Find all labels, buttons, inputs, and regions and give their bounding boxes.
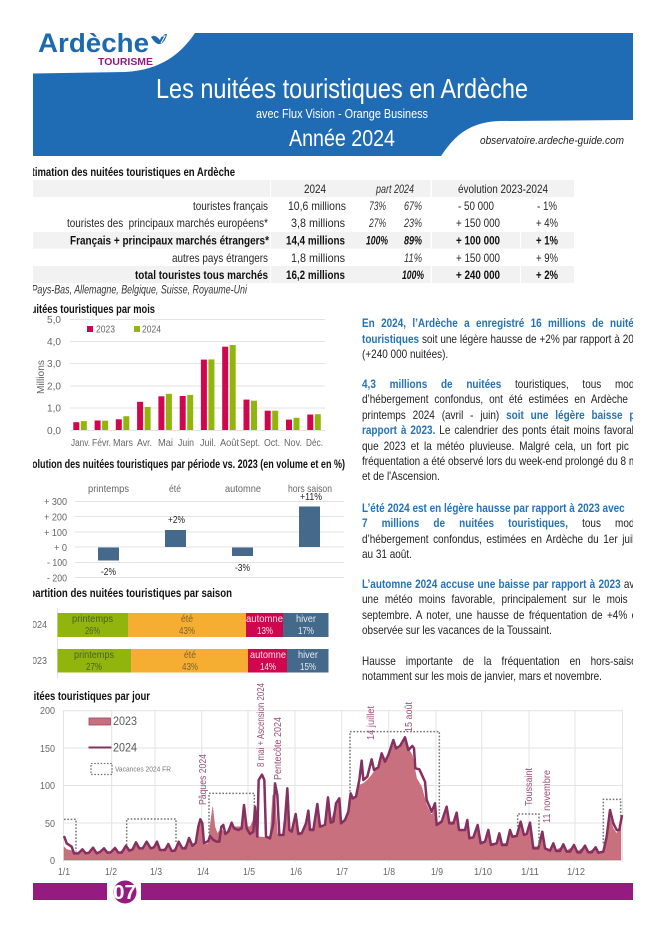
stacked bar 2023: automne	[250, 649, 286, 661]
row: total français + étrangers: Français + principaux marchés étrangers*	[70, 234, 269, 248]
paragraph: automne: L’automne 2024 accuse une baisse par rapport à 2023 avec	[362, 578, 645, 591]
paragraph: été: au 31 août.	[362, 548, 412, 561]
subtitle: avec Flux Vision - Orange Business	[256, 107, 428, 121]
dotted outlines: vacances 2024	[64, 732, 621, 852]
legend: Vacances 2024 FR	[115, 766, 171, 774]
paragraph: bilan 2024: (+240 000 nuitées).	[362, 348, 448, 361]
stacked bar 2023: 14%	[260, 661, 276, 673]
legend: 2023	[96, 324, 115, 336]
stacked bar 2023: 43%	[182, 661, 198, 673]
percent labels	[101, 491, 322, 578]
y axis labels: - 100	[47, 557, 67, 569]
annotations: key dates: 8 mai + Ascension 2024	[255, 683, 267, 767]
paragraph: printemps: rapport à 2023. Le calendrier des ponts était moins favorable	[362, 424, 645, 437]
x axis labels: 1/9	[431, 866, 443, 878]
row: total français + étrangers: + 1%	[536, 234, 558, 248]
x axis labels: 1/3	[150, 866, 162, 878]
row: marchés européens: touristes des principaux marchés européens*	[67, 216, 268, 230]
row: touristes français: - 1%	[537, 199, 557, 213]
paragraph: bilan 2024	[362, 318, 633, 360]
bars 2023	[73, 347, 313, 430]
y axis labels: + 200	[44, 512, 67, 524]
bars	[98, 506, 320, 560]
paragraph: hors-saison: notamment sur les mois de janvier, mars et novembre.	[362, 670, 602, 683]
month labels	[71, 438, 322, 448]
y axis labels: 2,0	[47, 380, 61, 392]
y axis labels	[35, 314, 61, 437]
month labels: Mai	[158, 437, 173, 449]
annotations: key dates: Toussaint	[523, 768, 535, 806]
row: total tous marchés: + 240 000	[456, 268, 500, 282]
y axis labels: 50	[45, 818, 55, 830]
paragraph: automne	[362, 579, 633, 634]
row: marchés européens: 23%	[403, 218, 422, 230]
stacked bar 2024: 13%	[257, 625, 273, 637]
season labels	[88, 484, 332, 494]
x axis labels: 1/8	[383, 866, 395, 878]
paragraph: automne: septembre. A noter, une hausse de fréquentation de +4% est	[362, 609, 645, 622]
y axis labels: + 0	[54, 542, 67, 554]
percent labels: +11%	[300, 491, 322, 503]
row: touristes français: - 50 000	[458, 199, 494, 213]
row: marchés européens	[67, 218, 558, 230]
percent labels: +2%	[168, 514, 185, 526]
year heading: Année 2024	[289, 125, 395, 151]
month labels: Janv.	[71, 437, 90, 449]
paragraph: été: d’hébergement confondus, estimées en Ardèche du 1er juillet	[362, 533, 645, 546]
row: total français + étrangers	[70, 236, 558, 247]
paragraph: automne: observée sur les vacances de la Toussaint.	[362, 624, 552, 637]
month labels: Juil.	[200, 437, 216, 449]
row: total tous marchés: total touristes tous marchés	[135, 268, 268, 282]
stacked bar 2023: 15%	[300, 661, 316, 673]
season labels: hors saison	[288, 483, 332, 495]
paragraph: printemps: 4,3 millions de nuitées touristiques, tous modes	[362, 378, 645, 391]
paragraph: hors-saison: Hausse importante de la fréquentation en hors-saison,	[362, 655, 645, 668]
annotations: key dates: 15 août	[403, 702, 415, 732]
table header row: évolution 2023-2024	[458, 182, 548, 196]
x axis labels: 1/4	[197, 866, 209, 878]
legend: 2024	[113, 742, 138, 754]
paragraph: printemps: d’hébergement confondus, ont été estimées en Ardèche au	[362, 393, 645, 406]
row: total tous marchés: 16,2 millions	[286, 268, 345, 282]
y axis labels: 0,0	[47, 425, 61, 437]
y axis labels: 100	[40, 780, 55, 792]
row: touristes français	[193, 202, 557, 212]
area chart: nuitées par jour	[40, 683, 622, 878]
row: touristes français: 73%	[369, 201, 386, 213]
text block: commentary	[362, 318, 633, 682]
stacked bar 2023: hiver	[298, 649, 318, 661]
percent labels: -3%	[235, 562, 250, 574]
stacked bar 2023: 2023	[27, 655, 47, 667]
table header row: 2024	[304, 182, 326, 196]
month labels: Avr.	[137, 437, 152, 449]
row: autres pays: autres pays étrangers	[172, 251, 268, 265]
row: touristes français: 67%	[404, 201, 422, 213]
row: marchés européens: + 150 000	[456, 216, 500, 230]
x axis labels: 1/2	[105, 866, 117, 878]
legend: 2023	[113, 716, 137, 728]
stacked bar 2024: été	[181, 613, 193, 625]
paragraph: bilan 2024: touristiques soit une légère hausse de +2% par rapport à 2023	[362, 332, 645, 346]
title: Les nuitées touristiques en Ardèche	[156, 73, 528, 104]
logo: Ardèche Tourisme: TOURISME	[98, 56, 153, 68]
footnote: *Pays-Bas, Allemagne, Belgique, Suisse, Royaume-Uni	[28, 284, 247, 296]
y axis labels: 3,0	[47, 358, 61, 370]
y axis labels: 4,0	[47, 336, 61, 348]
legend	[88, 716, 171, 774]
month labels: Déc.	[306, 437, 323, 449]
heading: répartition par saison: Répartition des nuitées touristiques par saison	[17, 588, 232, 600]
paragraph: été	[362, 503, 633, 558]
heading: estimation: Estimation des nuitées touristiques en Ardèche	[20, 167, 235, 179]
row: total français + étrangers: 14,4 millions	[286, 234, 345, 248]
month labels: Juin	[178, 437, 194, 449]
stacked bar 2024: 17%	[298, 625, 314, 637]
heading: nuitées par mois: Nuitées touristiques par mois	[24, 304, 155, 316]
month labels: Août	[220, 437, 239, 449]
season labels: printemps	[88, 483, 129, 495]
paragraph: printemps: fréquentation a été observé lors du week-end prolongé du 8 mai	[362, 455, 645, 468]
website: observatoire.ardeche-guide.com	[480, 135, 624, 147]
y axis labels: - 200	[47, 572, 67, 584]
paragraph: bilan 2024: En 2024, l’Ardèche a enregistré 16 millions de nuitées	[362, 317, 645, 330]
legend: 2024	[142, 324, 161, 336]
bar chart: évolution par période	[44, 483, 344, 584]
annotations: key dates: 11 novembre	[541, 770, 553, 823]
legend	[87, 326, 161, 332]
row: marchés européens: 27%	[368, 218, 386, 230]
x axis labels: 1/5	[243, 866, 255, 878]
paragraph: automne: une météo moins favorable, principalement sur le mois de	[362, 593, 645, 606]
paragraph: printemps: et de l'Ascension.	[362, 470, 440, 483]
season labels: automne	[225, 483, 261, 495]
stacked bar 2024: 43%	[179, 625, 195, 637]
y axis labels: 1,0	[47, 402, 61, 414]
stacked bar 2024	[27, 613, 328, 637]
stacked bar 2024: automne	[246, 613, 283, 625]
paragraph: été: 7 millions de nuitées touristiques, tous modes	[362, 517, 645, 530]
row: touristes français: 10,6 millions	[288, 199, 346, 213]
stacked bars: répartition par saison	[27, 608, 328, 678]
row: touristes français: touristes français	[193, 199, 268, 213]
x axis labels: 1/11	[521, 866, 539, 878]
row: total français + étrangers: 100%	[366, 236, 388, 248]
paragraph: hors-saison	[362, 656, 633, 682]
table header row: part 2024	[375, 184, 414, 196]
stacked bar 2024: 26%	[85, 625, 100, 637]
stacked bar 2024: 2024	[27, 619, 47, 631]
paragraph: printemps: que 2023 et la météo pluvieuse. Malgré cela, un fort pic de	[362, 440, 645, 453]
row: autres pays: + 150 000	[456, 251, 500, 265]
month labels: Mars	[113, 437, 133, 449]
row: total français + étrangers: + 100 000	[456, 234, 500, 248]
stacked bar 2023: printemps	[74, 649, 114, 661]
month labels: Févr.	[92, 437, 111, 449]
heading: nuitées par jour: Nuitées touristiques par jour	[21, 691, 150, 703]
y axis labels: 0	[50, 855, 55, 867]
month labels: Nov.	[284, 437, 302, 449]
y axis labels: Millions	[35, 360, 47, 394]
row: marchés européens: + 4%	[536, 216, 558, 230]
stacked bar 2023: été	[184, 649, 196, 661]
paragraph: printemps: printemps 2024 (avril - juin) soit une légère baisse par	[362, 409, 645, 422]
panel: table of estimated nights	[33, 180, 574, 283]
row: autres pays: 11%	[404, 253, 422, 265]
header banner	[33, 28, 633, 156]
logo: Ardèche Tourisme	[38, 33, 167, 65]
row: autres pays: + 9%	[536, 251, 558, 265]
y axis labels: 5,0	[47, 314, 61, 326]
row: total français + étrangers: 89%	[404, 236, 422, 248]
row: autres pays	[172, 254, 558, 264]
x axis labels: 1/10	[474, 866, 492, 878]
page number badge: 07	[113, 882, 136, 904]
season labels: été	[169, 483, 181, 495]
x axis labels: 1/7	[336, 866, 348, 878]
annotations: key dates	[197, 683, 553, 823]
daily series	[64, 732, 622, 860]
month labels: Oct.	[264, 437, 280, 449]
y axis labels: + 100	[44, 527, 67, 539]
paragraph: été: L’été 2024 est en légère hausse par rapport à 2023 avec	[362, 502, 625, 515]
x axis labels: 1/6	[290, 866, 302, 878]
row: total tous marchés: + 2%	[536, 268, 558, 282]
logo: Ardèche Tourisme: Ardèche	[38, 28, 149, 58]
x axis labels: 1/1	[58, 866, 70, 878]
y axis labels: + 300	[44, 496, 67, 508]
annotations: key dates: Pâques 2024	[197, 754, 209, 805]
row: total tous marchés: 100%	[402, 270, 424, 282]
page number badge	[107, 880, 141, 904]
annotations: key dates: 14 juillet	[365, 706, 377, 740]
annotations: key dates: Pentecôte 2024	[272, 717, 284, 780]
y axis labels: 150	[40, 743, 55, 755]
stacked bar 2023	[27, 649, 328, 673]
y axis labels	[40, 705, 55, 867]
area: 2023	[64, 739, 621, 860]
percent labels: -2%	[101, 566, 116, 578]
x axis labels: 1/12	[567, 866, 585, 878]
row: autres pays: 1,8 millions	[291, 251, 345, 265]
footer bar	[33, 880, 633, 904]
table header row	[304, 184, 548, 196]
bar chart: nuitées par mois	[35, 314, 325, 449]
month labels: Sept.	[240, 437, 260, 449]
line: 2024	[64, 737, 622, 853]
stacked bar 2024: hiver	[296, 613, 316, 625]
stacked bar 2023: 27%	[86, 661, 102, 673]
paragraph: printemps	[362, 379, 633, 480]
x axis labels	[58, 868, 585, 875]
heading: évolution par période: Évolution des nuitées touristiques par période vs. 2023 (en volume et en %)	[21, 458, 345, 471]
stacked bar 2024: printemps	[72, 613, 113, 625]
y axis labels	[44, 496, 67, 584]
bars 2024	[81, 345, 321, 430]
row: marchés européens: 3,8 millions	[291, 216, 345, 230]
row: total tous marchés	[135, 270, 558, 281]
y axis labels: 200	[40, 705, 55, 717]
